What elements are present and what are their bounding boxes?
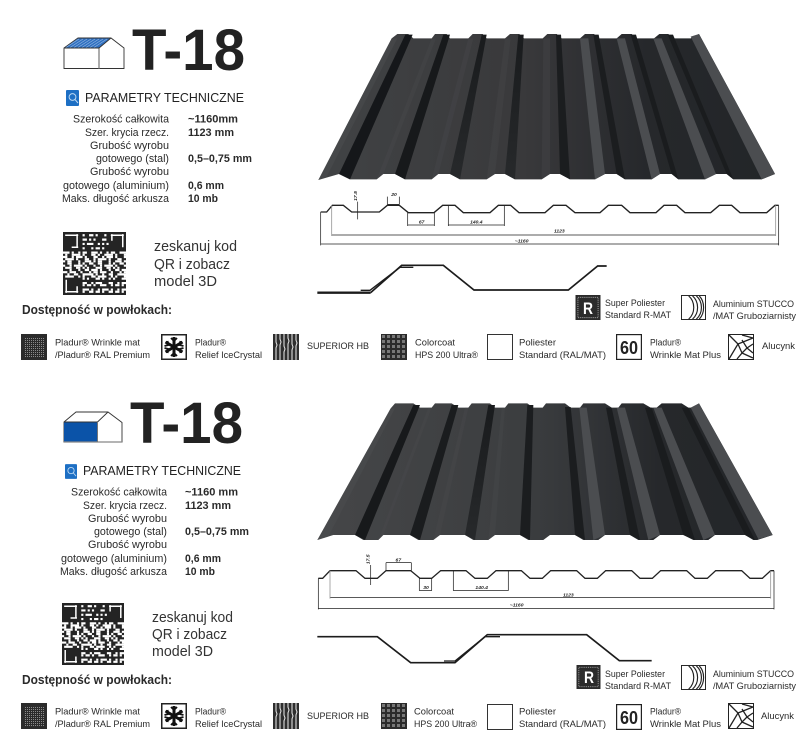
legend item: Relief IceCrystal	[162, 704, 262, 729]
text block: parameter table: 0,5–0,75 mm	[185, 526, 249, 538]
legend item: Poliester	[488, 334, 606, 360]
text block: parameter table: gotowego (stal)	[96, 153, 169, 165]
legend item: Colorcoat: Colorcoat	[415, 338, 455, 348]
profile cross-section with dimensions	[318, 554, 774, 609]
legend item: Poliester: Poliester	[519, 338, 556, 348]
legend item: Wrinkle Mat Plus: Wrinkle Mat Plus	[650, 719, 721, 729]
text block: parameter table: Grubość wyrobu	[88, 539, 167, 551]
legend item: Aluminium Stucco: /MAT Gruboziarnisty	[713, 311, 796, 321]
text block: scan prompt: model 3D	[152, 643, 213, 660]
legend item: Relief IceCrystal	[162, 335, 262, 360]
legend item: Wrinkle Mat Plus: Pladur®	[650, 338, 681, 348]
legend item: Superior HB: SUPERIOR HB	[307, 341, 369, 351]
legend item: Super Poliester	[576, 665, 671, 691]
text block: parameter table: 0,5–0,75 mm	[188, 153, 252, 165]
legend item: Wrinkle Mat Plus: Pladur®	[650, 706, 681, 716]
text block: parameter table: 10 mb	[185, 566, 216, 578]
legend item: Relief IceCrystal: Pladur®	[195, 706, 226, 716]
text block: parameter table: Grubość wyrobu	[90, 140, 169, 152]
legend item: Pladur Wrinkle: Pladur® Wrinkle mat	[55, 338, 140, 348]
profile cross-section with dimensions: ~1160	[515, 238, 529, 244]
text block: scan prompt	[152, 609, 233, 660]
legend item: Super Poliester	[576, 295, 671, 320]
legend item: Relief IceCrystal: Relief IceCrystal	[195, 350, 262, 360]
profile cross-section with dimensions: 17.5	[365, 554, 371, 564]
legend item: Wrinkle Mat Plus: 60	[620, 708, 638, 728]
legend item: Wrinkle Mat Plus	[617, 335, 721, 360]
legend item: Pladur Wrinkle	[21, 334, 150, 360]
roofing sheet 3D	[318, 34, 775, 180]
profile cross-section with dimensions: 1123	[554, 229, 565, 235]
profile cross-section with dimensions: 140.4	[470, 220, 483, 226]
legend item: Pladur Wrinkle	[21, 703, 150, 729]
text block: parameter table: ~1160mm	[188, 114, 238, 126]
heading: technical parameters: PARAMETRY TECHNICZNE	[83, 464, 241, 478]
profile cross-section with dimensions: 67	[396, 558, 401, 564]
text block: parameter table: Grubość wyrobu	[88, 513, 167, 525]
heading: available coatings: Dostępność w powłokach:	[22, 673, 172, 687]
legend item: Poliester	[488, 704, 606, 730]
profile cross-section with dimensions: ~1160	[510, 603, 524, 609]
legend item: Alucynk	[728, 704, 794, 728]
text block: scan prompt: zeskanuj kod	[154, 238, 237, 255]
heading: technical parameters: PARAMETRY TECHNICZNE	[85, 91, 244, 105]
legend item: Relief IceCrystal: Relief IceCrystal	[195, 719, 262, 729]
legend item: Pladur Wrinkle: /Pladur® RAL Premium	[55, 350, 150, 360]
text block: parameter table: ~1160 mm	[185, 486, 238, 498]
profile cross-section with dimensions: 17.5	[353, 191, 359, 201]
legend item: Super Poliester: R	[584, 668, 594, 687]
legend item: Alucynk: Alucynk	[761, 711, 794, 721]
legend item: Aluminium Stucco: Aluminium STUCCO	[713, 299, 794, 309]
legend item: Colorcoat: HPS 200 Ultra®	[414, 719, 477, 729]
legend item: Super Poliester: Standard R-MAT	[605, 681, 671, 691]
panel: bottom T-18 section	[21, 391, 796, 730]
text block: parameter table: 1123 mm	[188, 127, 234, 139]
profile cross-section with dimensions	[321, 191, 779, 245]
legend item: Pladur Wrinkle: Pladur® Wrinkle mat	[55, 706, 140, 716]
profile joint detail	[317, 635, 652, 663]
legend item: Super Poliester: R	[583, 299, 593, 318]
roofing sheet 3D	[317, 403, 773, 540]
profile cross-section with dimensions: 1123	[563, 593, 574, 599]
text block: parameter table: Maks. długość arkusza	[62, 193, 169, 205]
text block: scan prompt: model 3D	[154, 273, 217, 290]
legend item: Aluminium Stucco	[681, 665, 796, 691]
heading: available coatings: Dostępność w powłokach:	[22, 303, 172, 317]
legend item: Colorcoat	[381, 703, 477, 729]
legend item: Poliester: Standard (RAL/MAT)	[519, 719, 606, 729]
icon: house with blue roof	[64, 38, 124, 68]
legend item: Pladur Wrinkle: /Pladur® RAL Premium	[55, 719, 150, 729]
text block: scan prompt: zeskanuj kod	[152, 609, 233, 626]
legend item: Superior HB	[273, 703, 369, 729]
text block: parameter table: Szerokość całkowita	[73, 114, 169, 126]
legend item: Colorcoat: Colorcoat	[414, 706, 454, 716]
legend item: Aluminium Stucco: Aluminium STUCCO	[713, 669, 794, 679]
legend item: Super Poliester: Standard R-MAT	[605, 310, 671, 320]
text block: parameter table: gotowego (aluminium)	[61, 553, 167, 565]
profile cross-section with dimensions: 20	[390, 192, 397, 198]
QR code	[62, 603, 124, 665]
legend item: Wrinkle Mat Plus: 60	[620, 338, 638, 358]
text block: parameter table: 0,6 mm	[188, 180, 224, 192]
title: T-18	[130, 391, 243, 456]
text block: parameter table: Maks. długość arkusza	[60, 566, 167, 578]
text block: parameter table: Szer. krycia rzecz.	[83, 500, 167, 512]
profile cross-section with dimensions: 67	[419, 220, 425, 226]
legend item: Colorcoat: HPS 200 Ultra®	[415, 350, 478, 360]
text block: parameter table	[60, 486, 249, 578]
text block: parameter table: 0,6 mm	[185, 553, 221, 565]
text block: parameter table: Szerokość całkowita	[71, 486, 167, 498]
icon: magnifier	[66, 90, 79, 106]
legend item: Superior HB: SUPERIOR HB	[307, 711, 369, 721]
text block: scan prompt: QR i zobacz	[152, 626, 227, 643]
legend item: Poliester: Standard (RAL/MAT)	[519, 350, 606, 360]
legend item: Aluminium Stucco: /MAT Gruboziarnisty	[713, 681, 796, 691]
legend item: Wrinkle Mat Plus: Wrinkle Mat Plus	[650, 350, 721, 360]
QR code	[63, 232, 126, 295]
panel: top T-18 section	[21, 18, 796, 360]
icon: magnifier	[65, 464, 77, 479]
legend item: Superior HB	[273, 334, 369, 360]
legend item: Super Poliester: Super Poliester	[605, 298, 665, 308]
text block: scan prompt	[154, 238, 237, 290]
legend item: Super Poliester: Super Poliester	[605, 669, 665, 679]
profile joint detail	[317, 265, 607, 293]
text block: parameter table: Grubość wyrobu	[90, 166, 169, 178]
legend item: Relief IceCrystal: Pladur®	[195, 338, 226, 348]
text block: parameter table: gotowego (stal)	[94, 526, 167, 538]
profile cross-section with dimensions: 30	[423, 585, 429, 591]
legend item: Poliester: Poliester	[519, 706, 556, 716]
text block: parameter table: 1123 mm	[185, 500, 231, 512]
legend item: Aluminium Stucco	[681, 295, 796, 321]
title: T-18	[132, 18, 245, 83]
text block: parameter table: Szer. krycia rzecz.	[85, 127, 169, 139]
icon: house with blue wall	[64, 412, 122, 442]
profile cross-section with dimensions: 140.4	[475, 585, 488, 591]
text block: parameter table	[62, 114, 252, 205]
legend item: Colorcoat	[381, 334, 478, 360]
legend item: Alucynk: Alucynk	[762, 341, 795, 351]
legend: coatings	[21, 665, 796, 730]
text block: parameter table: 10 mb	[188, 193, 219, 205]
legend: coatings	[21, 295, 796, 360]
legend item: Alucynk	[728, 334, 795, 360]
text block: scan prompt: QR i zobacz	[154, 256, 230, 273]
legend item: Wrinkle Mat Plus	[617, 705, 721, 729]
text block: parameter table: gotowego (aluminium)	[63, 180, 169, 192]
